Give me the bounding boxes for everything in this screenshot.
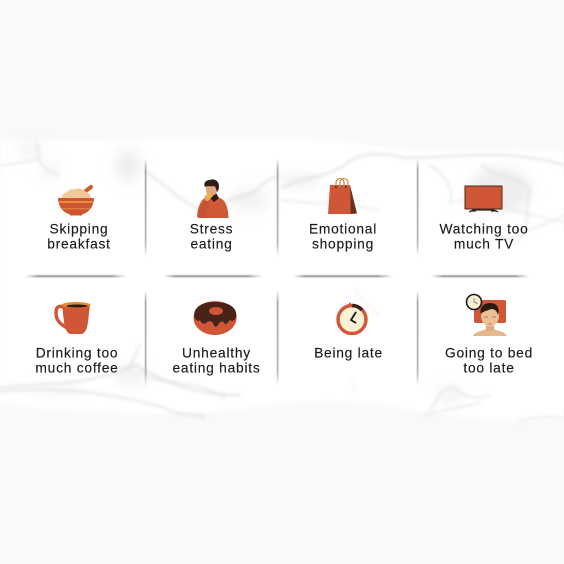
label: Unhealthy <box>182 346 251 360</box>
label: Drinking too <box>36 346 118 360</box>
icon: man eating <box>197 179 228 218</box>
panel: skipping breakfast <box>47 187 111 252</box>
panel: drinking too much coffee: much coffee <box>35 360 119 376</box>
panel: going to bed too late <box>445 294 533 376</box>
label: Watching too <box>439 222 529 236</box>
marble band <box>0 137 564 421</box>
label: Being late <box>314 346 383 360</box>
panel: unhealthy eating habits <box>172 301 260 376</box>
icon: shopping bag <box>328 178 357 214</box>
panel: watching too much tv <box>439 186 529 252</box>
panel: unhealthy eating habits: eating habits <box>172 360 260 376</box>
panel: emotional shopping <box>309 178 377 252</box>
panel: emotional shopping: shopping <box>312 236 374 252</box>
label: Emotional <box>309 222 377 236</box>
label: Going to bed <box>445 346 533 360</box>
label: Stress <box>190 222 233 236</box>
icon: clock <box>338 302 366 334</box>
icon: cereal bowl <box>58 187 94 216</box>
panel: drinking too much coffee <box>35 302 119 376</box>
icon: television <box>465 186 502 212</box>
icon: sleeping person and clock <box>466 294 507 336</box>
panel: stress eating <box>190 179 233 252</box>
icon: coffee mug <box>56 302 90 334</box>
panel: being late <box>314 302 383 360</box>
panel: skipping breakfast: breakfast <box>47 236 111 252</box>
icon: donut <box>194 301 236 335</box>
panel: watching too much tv: much TV <box>454 236 514 252</box>
panel: stress eating: eating <box>190 236 233 252</box>
row dividers <box>25 276 530 277</box>
panel: going to bed too late: too late <box>463 360 515 376</box>
label: Skipping <box>50 222 108 236</box>
column dividers <box>145 160 418 386</box>
